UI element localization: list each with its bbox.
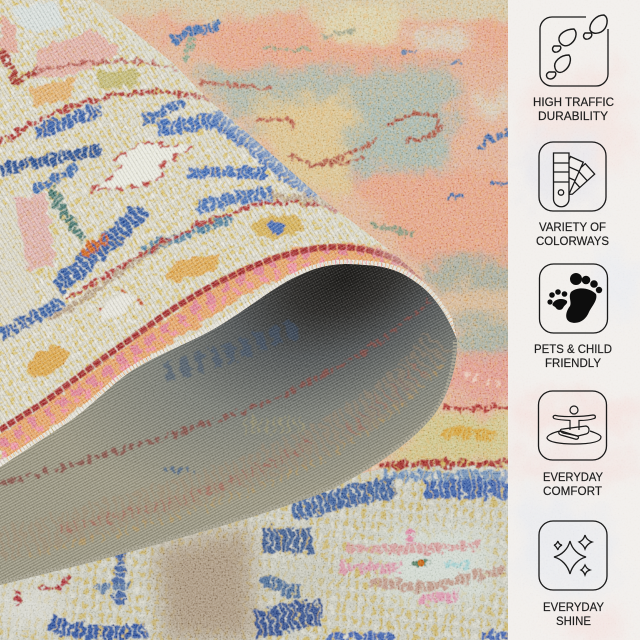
- panel weave grain: [508, 0, 640, 640]
- label: pets and child friendly: FRIENDLY: [545, 356, 601, 370]
- rolled rug: underside: [0, 264, 458, 585]
- label: everyday shine: EVERYDAY: [543, 600, 604, 614]
- floor rug: salmon field: [0, 0, 508, 474]
- label: variety of colorways: [536, 220, 609, 248]
- label: everyday comfort: COMFORT: [543, 484, 603, 498]
- selvage band: [0, 247, 457, 467]
- label: everyday shine: [543, 600, 604, 628]
- floor weave grain: [0, 0, 508, 640]
- side panel: [508, 0, 640, 640]
- label: everyday comfort: [543, 470, 603, 498]
- knot texture: [0, 0, 457, 466]
- faded rug pattern: [510, 60, 640, 640]
- pale shoulder of the roll: [93, 0, 452, 317]
- icon: footprints: [540, 15, 608, 86]
- label: variety of colorways: COLORWAYS: [536, 234, 609, 248]
- top-left pink medallion: [35, 30, 120, 78]
- label: pets and child friendly: PETS & CHILD: [534, 342, 612, 356]
- icon: paw and child foot: [540, 264, 608, 333]
- label: pets and child friendly: [534, 342, 612, 370]
- icon: meditating figure: [538, 391, 606, 460]
- rolled rug: patterned top: [0, 0, 457, 467]
- icon: sparkles: [539, 521, 607, 590]
- label: high traffic durability: HIGH TRAFFIC: [533, 95, 614, 109]
- label: high traffic durability: DURABILITY: [538, 109, 608, 123]
- label: everyday comfort: EVERYDAY: [543, 470, 603, 484]
- border motifs: [23, 213, 304, 383]
- roll weave grain: [0, 0, 454, 465]
- icon: colour swatch fan: [539, 142, 606, 211]
- label: variety of colorways: VARIETY OF: [539, 220, 606, 234]
- centre cross motif: [93, 142, 190, 190]
- label: everyday shine: SHINE: [556, 614, 591, 628]
- floor rug: lower field: [0, 460, 540, 640]
- label: high traffic durability: [533, 95, 614, 123]
